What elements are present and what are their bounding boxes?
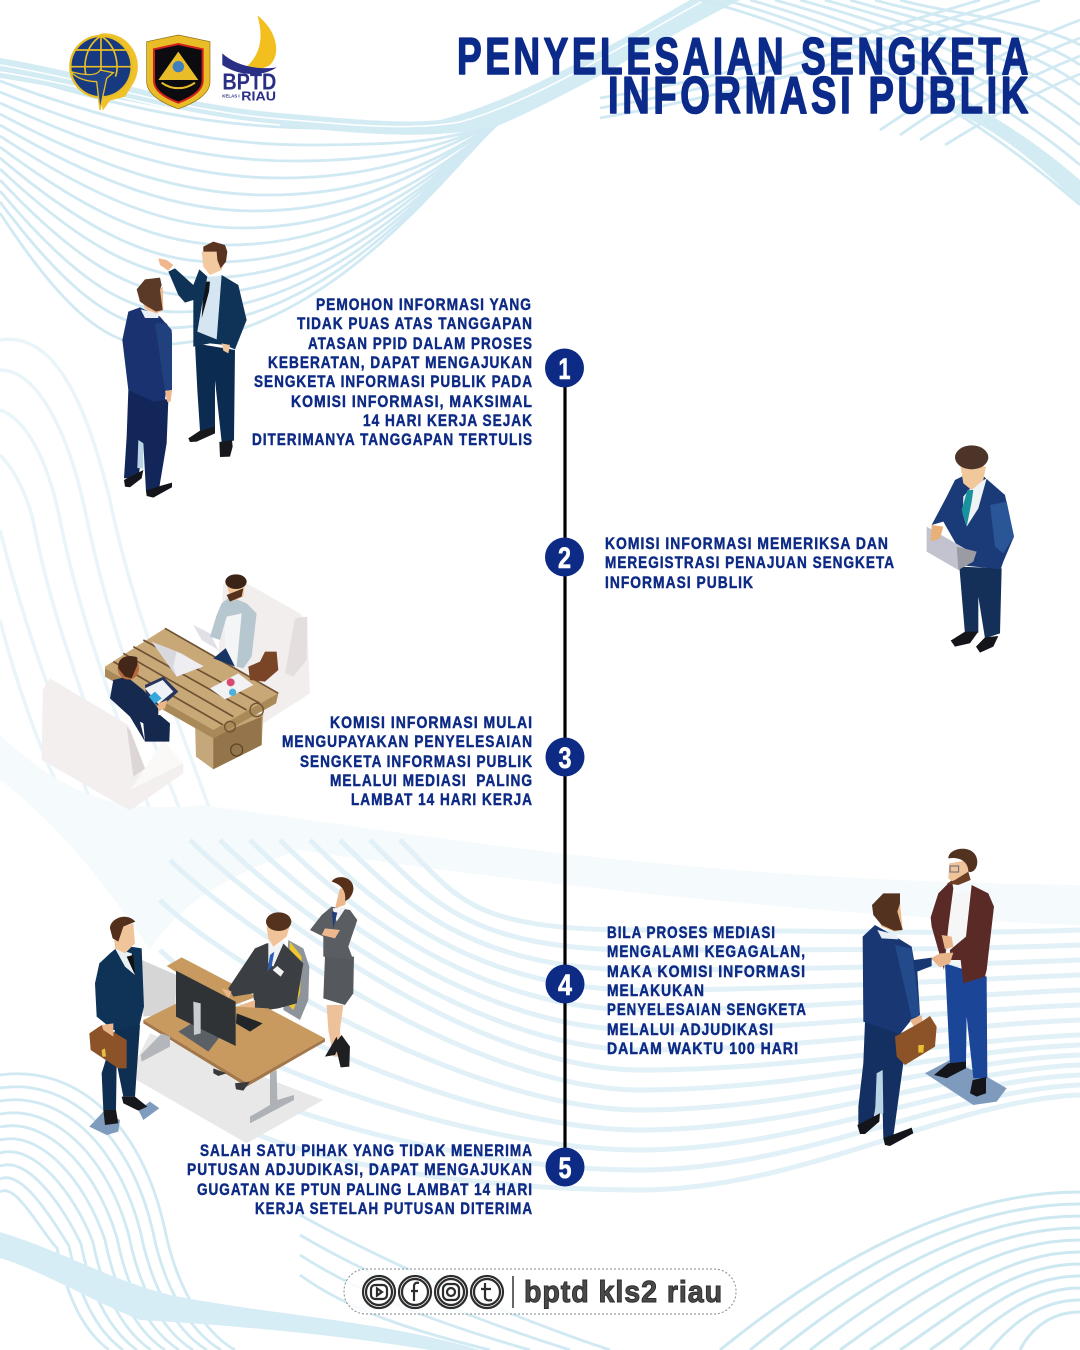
step 1 text <box>252 296 533 449</box>
icon: tumblr <box>471 1276 503 1308</box>
illustration: two men shaking hands <box>857 849 1007 1146</box>
icon: facebook <box>399 1276 431 1308</box>
illustration: man with laptop <box>927 445 1014 653</box>
step 4 text <box>607 924 807 1058</box>
step 3 text: MELALUI MEDIASI PALING <box>330 772 533 790</box>
step 1 text: SENGKETA INFORMASI PUBLIK PADA <box>254 373 533 391</box>
step 4 text: MELALUI ADJUDIKASI <box>607 1021 774 1039</box>
step 1 text: KOMISI INFORMASI, MAKSIMAL <box>291 393 533 411</box>
step 2 number badge: 2 <box>558 542 571 575</box>
illustration: two businessmen talking <box>122 242 247 498</box>
illustration: office desk with three people <box>89 877 357 1143</box>
logo: ministry of transportation emblem <box>70 33 138 111</box>
logo: BPTD Riau: KELAS I <box>222 93 240 98</box>
step 5 text: KERJA SETELAH PUTUSAN DITERIMA <box>255 1200 533 1218</box>
step 2 text: INFORMASI PUBLIK <box>605 574 754 592</box>
step 4 number badge: 4 <box>558 969 572 1002</box>
step 4 text: PENYELESAIAN SENGKETA <box>607 1001 807 1019</box>
step 3 text: MENGUPAYAKAN PENYELESAIAN <box>282 733 533 751</box>
footer handle text: bptd kls2 riau <box>524 1274 723 1309</box>
step 1 text: KEBERATAN, DAPAT MENGAJUKAN <box>268 354 533 372</box>
icon: youtube <box>363 1276 395 1308</box>
title <box>457 28 1032 125</box>
step 5 text: GUGATAN KE PTUN PALING LAMBAT 14 HARI <box>197 1181 533 1199</box>
timeline line <box>563 368 567 1167</box>
step 4 text: MELAKUKAN <box>607 982 705 1000</box>
step 1 text: TIDAK PUAS ATAS TANGGAPAN <box>297 315 533 333</box>
illustration: meeting at wooden table with sofas <box>42 574 310 811</box>
step 1 number badge <box>545 348 584 388</box>
step 2 text <box>605 535 895 592</box>
step 5 number badge: 5 <box>558 1152 572 1185</box>
step 4 text: MENGALAMI KEGAGALAN, <box>607 943 806 961</box>
step 4 text: DALAM WAKTU 100 HARI <box>607 1040 799 1058</box>
step 2 text: KOMISI INFORMASI MEMERIKSA DAN <box>605 535 889 553</box>
step 4 text: MAKA KOMISI INFORMASI <box>607 963 806 981</box>
step 1 text: 14 HARI KERJA SEJAK <box>363 412 533 430</box>
icon: instagram <box>435 1276 467 1308</box>
step 3 text <box>282 714 533 809</box>
step 3 text: KOMISI INFORMASI MULAI <box>330 714 533 732</box>
step 1 number badge: 1 <box>558 353 570 386</box>
logo: shield emblem <box>147 35 210 109</box>
step 3 number badge: 3 <box>558 742 572 775</box>
step 3 text: LAMBAT 14 HARI KERJA <box>351 791 533 809</box>
step 5 text: PUTUSAN ADJUDIKASI, DAPAT MENGAJUKAN <box>187 1161 533 1179</box>
step 5 text: SALAH SATU PIHAK YANG TIDAK MENERIMA <box>200 1142 533 1160</box>
step 3 text: SENGKETA INFORMASI PUBLIK <box>300 753 533 771</box>
logo: BPTD Riau <box>222 15 277 104</box>
step 2 number badge <box>545 538 584 576</box>
footer social media pill <box>344 1269 736 1314</box>
logo: BPTD Riau: RIAU <box>241 90 276 104</box>
step 1 text: DITERIMANYA TANGGAPAN TERTULIS <box>252 431 533 449</box>
step 5 text <box>187 1142 533 1218</box>
step 1 text: PEMOHON INFORMASI YANG <box>316 296 532 314</box>
logo: BPTD Riau: BPTD <box>222 68 276 94</box>
step 1 text: ATASAN PPID DALAM PROSES <box>308 335 533 353</box>
step 2 text: MEREGISTRASI PENAJUAN SENGKETA <box>605 554 895 572</box>
step 4 text: BILA PROSES MEDIASI <box>607 924 776 942</box>
step 5 number badge <box>546 1148 584 1186</box>
step 3 number badge <box>546 738 584 776</box>
step 4 number badge <box>546 964 584 1004</box>
